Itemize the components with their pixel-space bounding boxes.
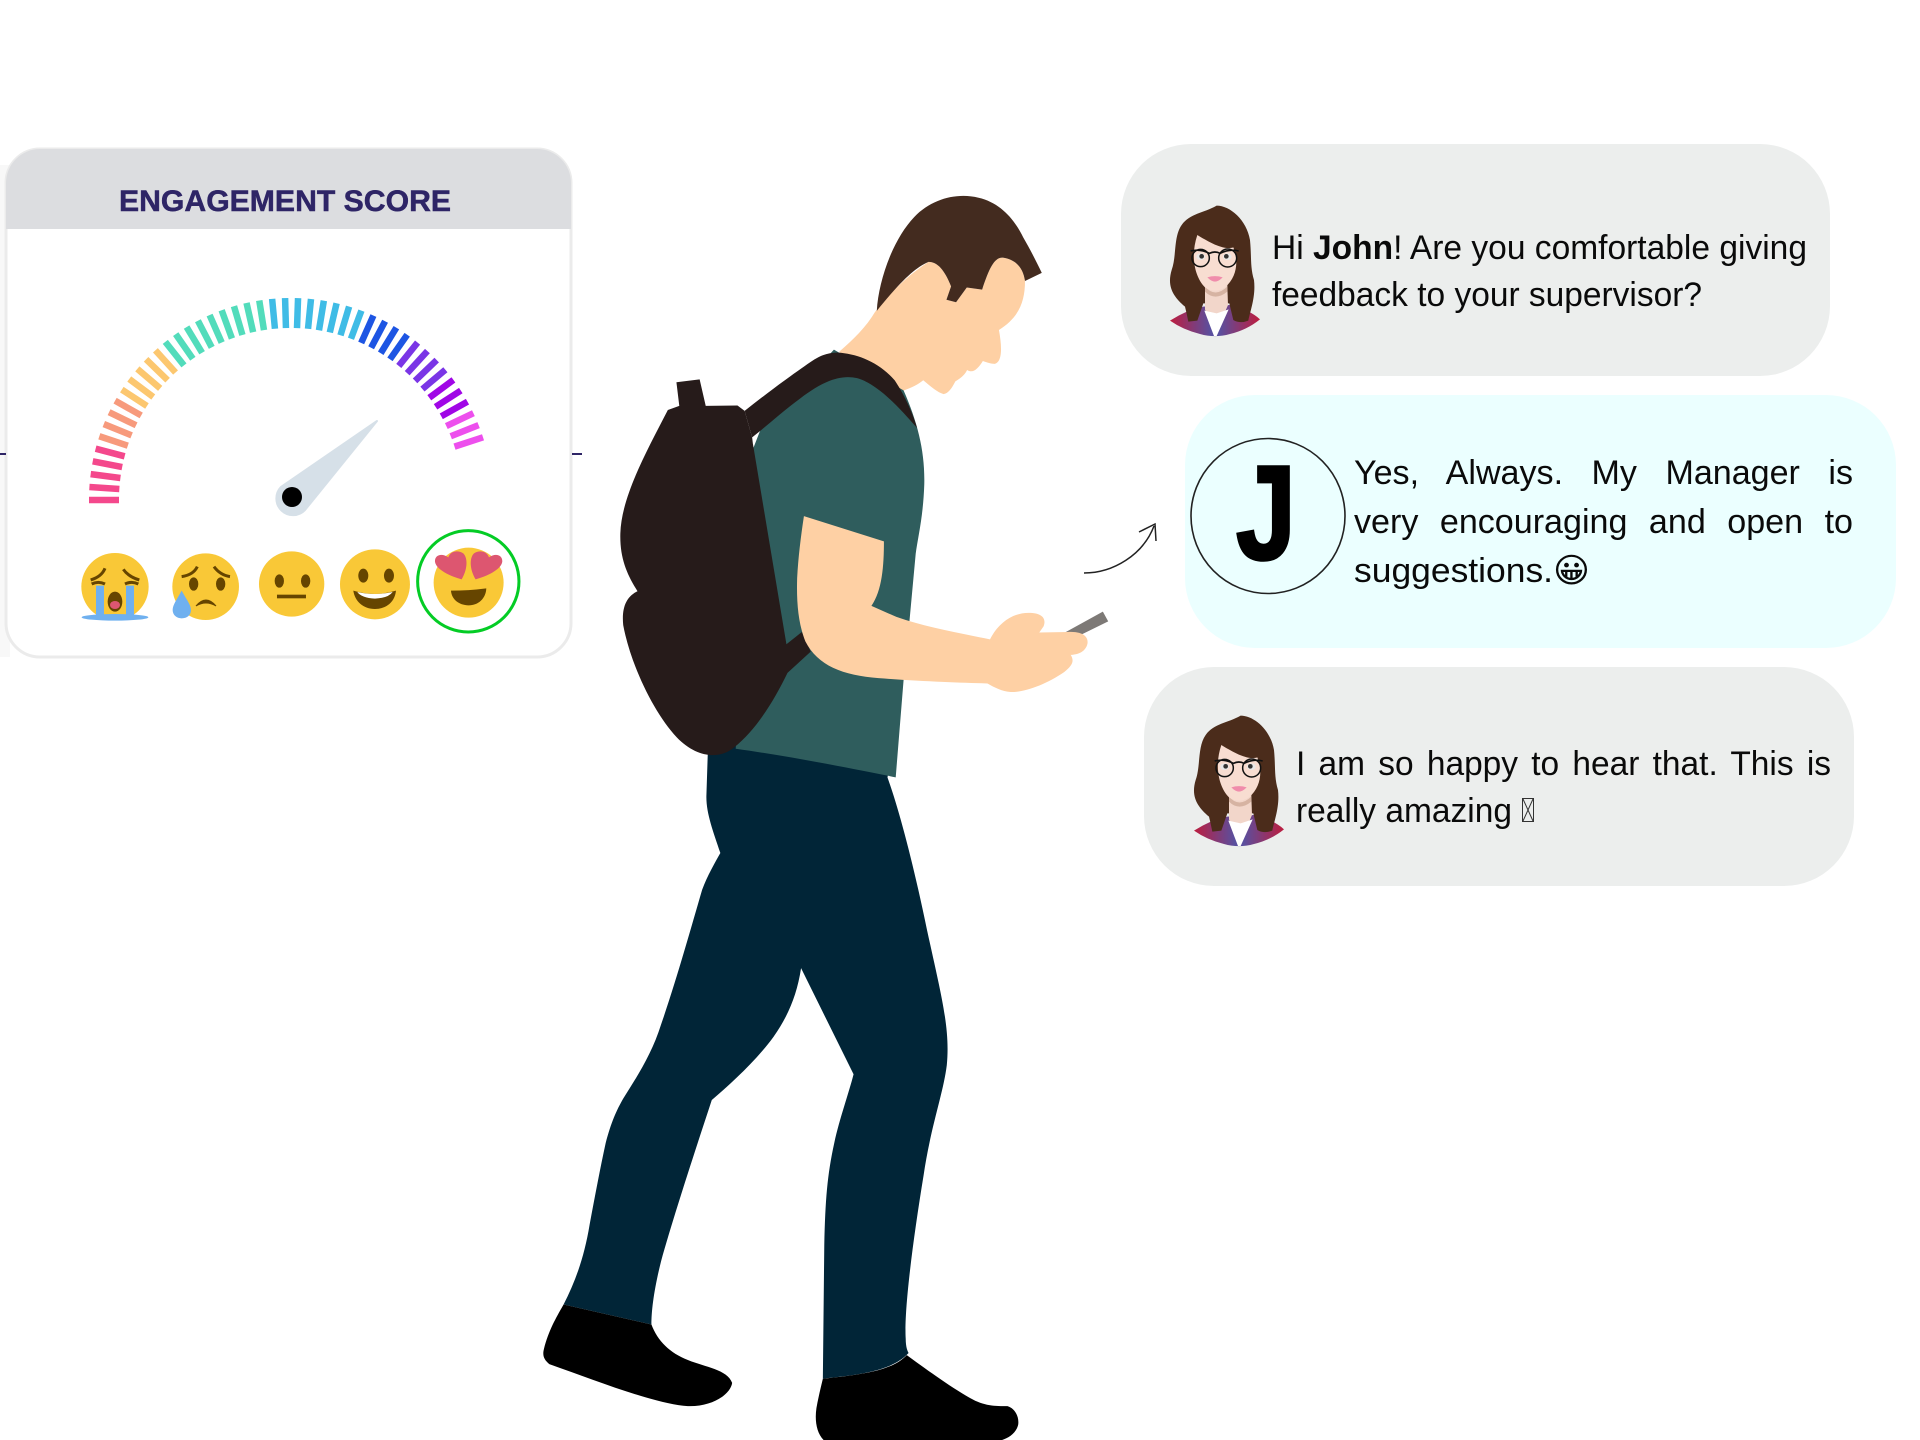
message text: suggestions.😀 <box>1354 551 1590 591</box>
t-shirt <box>736 350 924 777</box>
panel: chat bubble manager response <box>1144 667 1854 886</box>
right shoe <box>816 1355 1018 1440</box>
panel: engagement score card <box>0 149 571 657</box>
icon: crying face <box>81 553 149 621</box>
icon: smiling face <box>340 549 410 619</box>
arm and hand <box>797 516 1088 692</box>
message text: Hi John! Are you comfortable giving <box>1272 229 1807 267</box>
card header band <box>6 149 571 229</box>
upper body <box>620 196 1108 777</box>
message text <box>1354 454 1853 591</box>
backpack strap <box>745 352 917 437</box>
icon: J initial circle <box>1191 438 1345 594</box>
backpack <box>620 379 811 755</box>
message text: really amazing <box>1296 792 1512 830</box>
panel: chat bubble John reply <box>1185 395 1896 648</box>
title: ENGAGEMENT SCORE <box>119 185 451 218</box>
icon: sad tear face <box>172 553 239 620</box>
icon: heart-eyes face <box>434 548 504 618</box>
message text: Yes, Always. My Manager is <box>1354 454 1853 492</box>
emoji row <box>81 531 519 632</box>
panel: chat bubble manager question <box>1121 144 1830 376</box>
arrow from phone to chat <box>1084 524 1156 573</box>
icon: J initial circle: J <box>1236 439 1296 588</box>
icon: manager avatar <box>1170 206 1260 336</box>
message text: I am so happy to hear that. This is <box>1296 745 1831 783</box>
message text: very encouraging and open to <box>1354 503 1853 541</box>
gauge needle <box>276 421 377 515</box>
hair <box>877 196 1042 311</box>
icon: manager avatar <box>1194 716 1284 846</box>
illustration: man with backpack using phone <box>543 196 1108 1440</box>
icon: missing glyph box <box>1522 798 1534 822</box>
phone <box>1064 612 1108 639</box>
face and neck <box>839 258 1025 394</box>
legs and trousers <box>543 718 1018 1440</box>
left shoe <box>543 1304 732 1406</box>
message text <box>1296 745 1831 830</box>
icon: neutral face <box>259 551 324 617</box>
message text: feedback to your supervisor? <box>1272 276 1702 314</box>
card divider ticks <box>0 453 582 455</box>
message text <box>1272 229 1807 314</box>
gauge arc ticks <box>89 298 483 500</box>
selected emoji ring <box>418 531 519 632</box>
